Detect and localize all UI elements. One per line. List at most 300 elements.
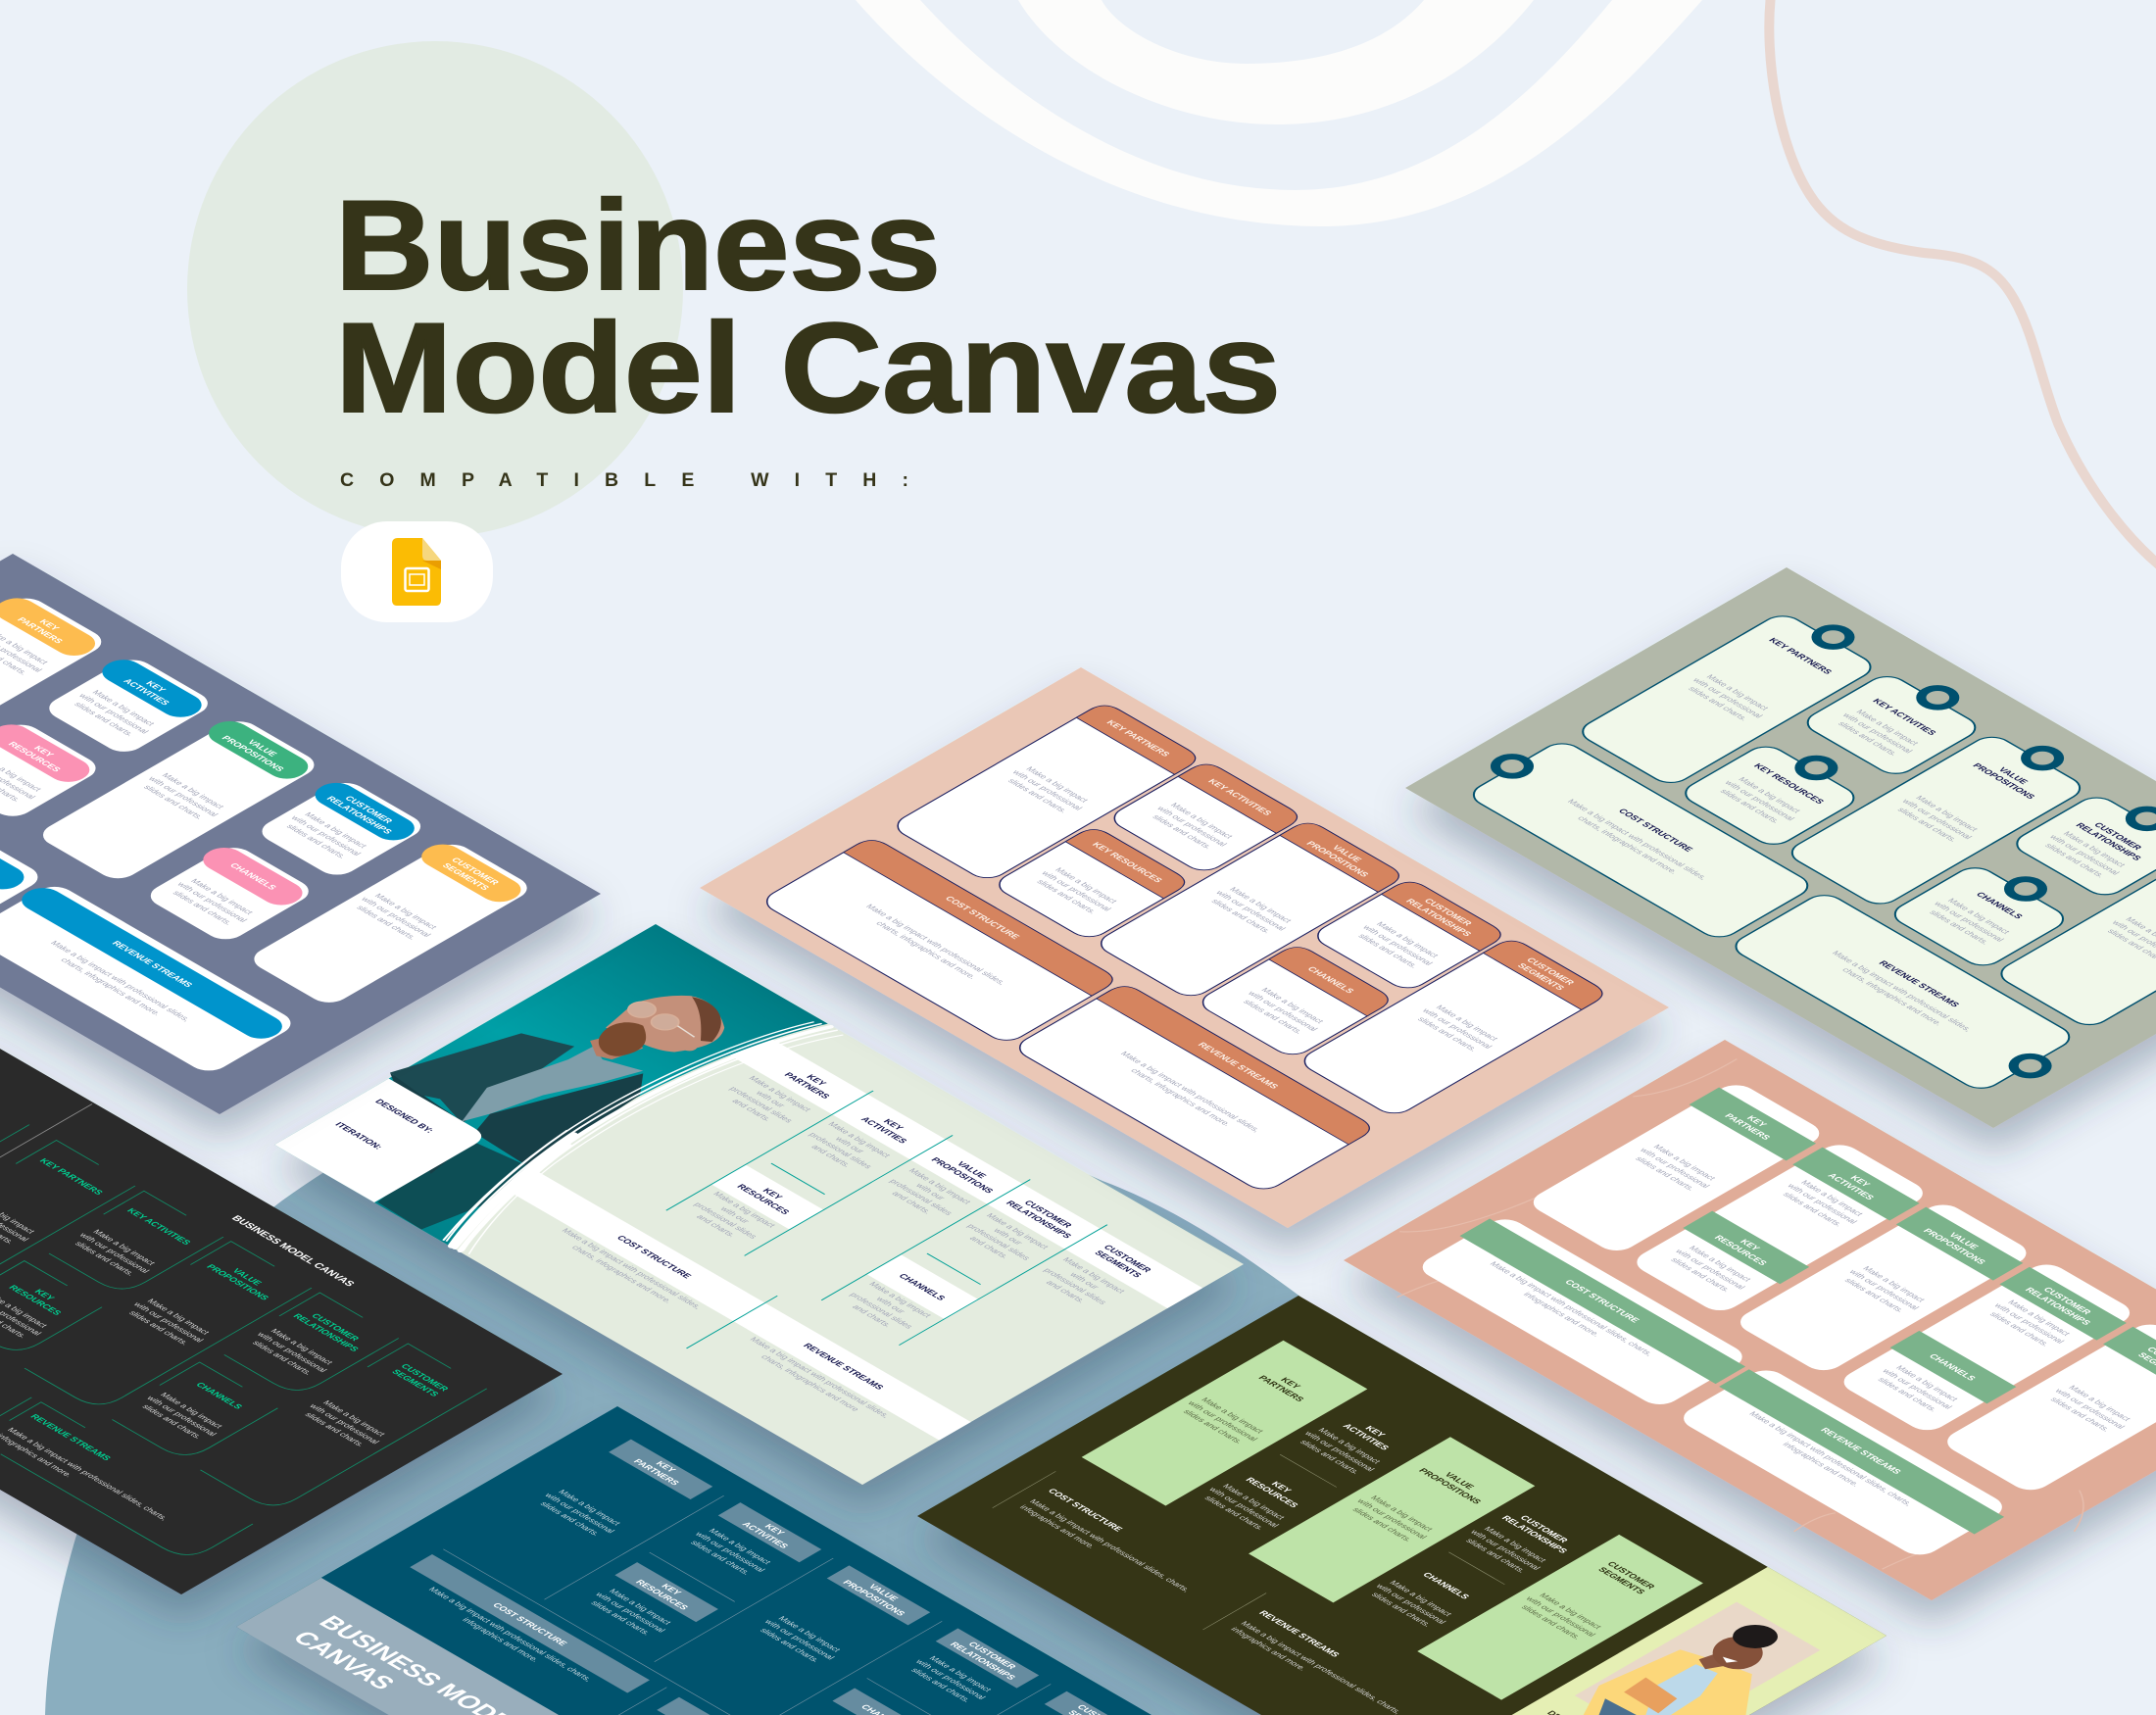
panel: mint canvas slide with portrait [274,924,1244,1485]
customer relationships card: slides and charts. [1356,932,1420,969]
key activities card: slides and charts. [1836,720,1900,758]
customer segments card [1993,845,2156,1030]
photo: woman with tablet [1584,1625,1778,1715]
key activities card: with our professional [1839,711,1915,755]
value propositions card: slides and charts. [1209,898,1274,935]
channels card: slides and charts. [1928,908,1991,946]
key partners card [1574,603,1893,788]
dark slide labels: VALUE [230,1267,264,1287]
dark slide body copy: slides and charts. [303,1411,368,1448]
mint slide labels: COST STRUCTURE [614,1234,694,1280]
customer relationships card: RELATIONSHIPS [2023,1286,2093,1326]
value propositions card [1730,1199,2037,1377]
revenue streams card: REVENUE STREAMS [1196,1041,1281,1090]
navy slide labels: KEY [762,1523,787,1537]
mint slide body copy: and charts. [890,1190,934,1215]
mint slide body copy: Make a big impact [984,1211,1051,1250]
customer relationships card: Make a big impact [2006,1298,2073,1337]
dark slide labels [0,1153,451,1525]
key partners card: slides and charts. [1005,777,1070,814]
revenue streams card [1728,891,2090,1101]
mint slide body copy: Make a big impact [1060,1256,1127,1295]
key resources card: slides and charts. [1669,1256,1733,1294]
customer relationships card: CUSTOMER [2041,1286,2093,1316]
mint slide body copy: Make a big impact with professional slides, [560,1227,704,1310]
key partners card: KEY PARTNERS [1767,636,1835,675]
value propositions card: Make a big impact [1228,886,1294,924]
key activities card: KEY ACTIVITIES [1871,697,1938,736]
mint slide labels: PROPOSITIONS [929,1156,996,1195]
customer segments card: Make a big impact [1434,1004,1500,1042]
cost structure card [1452,731,1816,942]
olive slide body copy: with our professional [1523,1594,1598,1638]
navy slide labels: COST STRUCTURE [491,1601,569,1647]
mint slide body copy: Make a big impact with professional slides, [748,1336,892,1419]
customer relationships card: slides and charts. [1987,1310,2052,1348]
navy slide labels: PROPOSITIONS [841,1579,907,1617]
key partners card [1523,1079,1831,1257]
channels card: Make a big impact [189,877,256,915]
dark slide heading: BUSINESS MODEL CANVAS [228,1214,357,1288]
key resources card: Make a big impact [1737,775,1803,814]
navy slide body copy: with our professional [913,1657,988,1701]
key partners card: KEY [1744,1114,1769,1128]
key partners card: Make a big impact [1024,765,1091,804]
olive slide labels: KEY [1279,1376,1302,1390]
olive slide labels: KEY [1269,1480,1294,1494]
mint slide body copy: with our [1067,1270,1102,1291]
dark slide body copy: with our professional [144,1394,220,1438]
olive slide photo backdrop [1575,1602,1820,1715]
channels card: CHANNELS [1927,1352,1978,1382]
key partners card: with our professional [1638,1146,1712,1190]
olive slide body copy [1011,1375,1641,1715]
revenue streams card: Make a big impact with professional slides, [49,939,193,1023]
key activities card: Make a big impact [1799,1179,1866,1217]
title [335,173,1281,439]
mint slide teal dividers [557,1090,1107,1408]
customer relationships card: Make a big impact [2061,830,2128,868]
key resources card [991,825,1192,942]
customer relationships card: with our professional [288,813,364,858]
navy slide body copy [393,1461,1106,1715]
mint slide body copy: and charts. [851,1303,894,1329]
olive slide body copy: slides and charts. [1181,1408,1246,1446]
channels card: slides and charts. [1242,998,1305,1035]
customer segments card: slides and charts. [355,904,418,941]
cost structure card [759,836,1120,1045]
mint slide body copy: with our [832,1135,867,1154]
key partners card: slides and charts. [1687,685,1750,722]
navy slide labels: KEY [660,1583,683,1596]
olive slide body copy: Make a big impact [1482,1525,1548,1563]
olive slide body copy: Make a big impact [1316,1426,1383,1465]
navy slide body copy: with our professional [693,1530,767,1573]
customer relationships card: CUSTOMER [2092,821,2144,852]
panel: navy canvas slide [236,1406,1184,1715]
mint slide body copy: professional slides [848,1291,915,1330]
revenue streams card [1011,982,1377,1194]
dark slide body copy: with our professional [76,1231,152,1274]
key partners card: PARTNERS [1723,1112,1773,1141]
value propositions card: Make a big impact [1861,1265,1928,1303]
subtitle: compatible with: COMPATIBLE WITH: [340,469,908,491]
customer segments card: with our professional [359,895,433,938]
mint slide body copy: professional slides [807,1131,874,1170]
mint slide body copy: professional slides [727,1085,795,1124]
designed by panel [274,1079,489,1202]
dark slide body copy: with our professional [254,1330,329,1374]
revenue streams card: REVENUE STREAMS [1877,959,1962,1008]
key partners card: with our professional [1690,676,1765,719]
customer segments card: SEGMENTS [1515,961,1567,992]
decorative squiggle line [1769,0,2156,566]
key activities card: with our professional [1785,1182,1860,1225]
dark slide labels: RELATIONSHIPS [291,1312,361,1352]
panel: slate blue canvas slide [0,554,601,1114]
navy slide labels: PARTNERS [631,1457,681,1487]
navy slide separators [372,1441,1158,1715]
decorative concentric arcs [856,0,1702,226]
mint slide body copy: professional slides [692,1200,760,1240]
key activities card [1685,1139,1935,1283]
designed by panel: DESIGNED BY: [373,1098,436,1134]
key activities card: Make a big impact [1854,709,1921,747]
value propositions card [29,713,322,883]
navy slide body copy: slides and charts. [538,1500,603,1538]
mint slide body copy: and charts. [1044,1279,1088,1304]
revenue streams card: Make a big impact with professional slides, charts, [1747,1410,1915,1507]
channels card [1833,1331,2016,1437]
mint slide labels: REVENUE STREAMS [801,1342,886,1391]
customer segments card [1936,1318,2156,1496]
dark slide body copy: slides and charts. [140,1403,205,1440]
key activities card: slides and charts. [1781,1191,1845,1228]
key resources card: with our professional [1722,778,1797,822]
customer segments card: slides and charts. [1416,1015,1480,1053]
revenue streams card: REVENUE STREAMS [1819,1426,1903,1475]
mint slide labels: PARTNERS [782,1071,832,1100]
customer segments card: CUSTOMER [1525,956,1577,986]
cost structure card: COST STRUCTURE [1616,808,1695,853]
channels card: CHANNELS [1974,891,2025,920]
customer relationships card: slides and charts. [2043,842,2107,879]
navy slide labels [437,1452,1127,1715]
navy slide body copy: with our professional [593,1591,668,1634]
dark slide body copy: with our professional [131,1300,206,1344]
olive slide labels: PARTNERS [1256,1374,1306,1403]
mint slide labels [558,1065,1154,1410]
channels card: CHANNELS [1305,965,1356,995]
value propositions card: with our professional [1899,797,1975,841]
olive slide body copy: infographics and more. [1017,1503,1098,1549]
navy slide labels: RELATIONSHIPS [948,1641,1018,1681]
key activities card [36,653,217,757]
key resources card: slides and charts. [1035,878,1100,915]
value propositions card: VALUE [245,738,279,758]
channels card: with our professional [1880,1367,1955,1410]
navy slide body copy: Make a big impact [707,1527,773,1565]
dark slide body copy: Make a big impact [269,1327,335,1366]
customer relationships card: with our professional [1991,1301,2067,1345]
olive slide body copy: Make a big impact [1538,1592,1604,1630]
revenue streams card: Make a big impact with professional slides, [1118,1050,1263,1133]
key activities card: KEY ACTIVITIES [1206,777,1274,816]
mint slide body copy: with our [913,1181,948,1201]
decorative blue arch [45,1127,1372,1715]
value propositions card: with our professional [1846,1268,1922,1311]
mint slide labels: ACTIVITIES [858,1115,909,1145]
cost structure card: Make a big impact with professional slides, charts, [1488,1260,1655,1357]
channels card: with our professional [1245,989,1320,1033]
cost structure card: COST STRUCTURE [943,895,1022,941]
key resources card: Make a big impact [1687,1245,1753,1283]
value propositions card: VALUE [1330,844,1364,863]
channels card: CHANNELS [227,861,278,891]
value propositions card [1093,819,1406,1001]
customer segments card [1297,937,1609,1118]
dark slide labels: SEGMENTS [390,1368,441,1397]
dark slide body copy: slides and charts. [127,1309,191,1347]
dark slide body copy: with our professional [307,1401,382,1446]
mint slide body copy: professional slides [965,1222,1033,1261]
icon: Google Slides badge [341,521,493,622]
olive slide body copy: with our professional [1301,1429,1377,1473]
mint slide labels: CUSTOMER [1022,1199,1074,1229]
key partners card: KEY PARTNERS [1104,718,1172,758]
olive slide body copy: Make a big impact [1388,1579,1454,1617]
mint slide body copy: professional slides [888,1177,955,1216]
customer segments card: SEGMENTS [440,861,492,892]
cost structure card [1410,1212,1756,1413]
key activities card: ACTIVITIES [1826,1172,1877,1201]
key activities card: KEY [144,679,168,694]
key partners card [0,591,110,759]
key resources card: with our professional [1673,1248,1747,1291]
customer relationships card: RELATIONSHIPS [1403,898,1474,938]
key resources card: RESOURCES [6,740,63,773]
customer segments card [241,837,535,1007]
olive slide labels: KEY [1363,1424,1388,1439]
key resources card: slides and charts. [1718,788,1783,824]
panel: salmon canvas slide [1344,1040,2156,1600]
navy slide body copy: Make a big impact with professional slides, charts, [426,1586,595,1683]
navy slide labels: CUSTOMER [966,1641,1018,1671]
mint slide body copy: with our [717,1204,752,1225]
mint slide body copy: Make a big impact [867,1280,934,1319]
value propositions card: Make a big impact [160,771,226,810]
navy slide header tabs [410,1440,1148,1715]
customer segments card: with our professional [1419,1006,1494,1050]
navy slide body copy: slides and charts. [689,1539,753,1576]
key resources card: Make a big impact [1053,866,1119,905]
olive slide labels: RELATIONSHIPS [1499,1514,1570,1554]
mint slide body copy: professional slides [1042,1266,1109,1305]
key resources card: KEY RESOURCES [1090,841,1164,884]
channels card [1195,943,1396,1059]
cost structure card: Make a big impact with professional slides, [1565,798,1710,881]
key resources card [0,717,104,821]
revenue streams card: infographics and more. [1781,1441,1862,1488]
dark slide labels: PROPOSITIONS [205,1263,271,1301]
key partners card: Make a big impact [1651,1143,1718,1182]
cost structure card: charts, infographics and more. [1576,814,1681,875]
mint slide body copy: and charts. [730,1098,774,1123]
mint slide labels: CUSTOMER [1102,1244,1153,1274]
channels card: Make a big impact [1945,897,2012,935]
mint slide body copy [512,1074,1128,1431]
key partners card: Make a big impact [1704,673,1771,711]
mint slide labels: RELATIONSHIPS [1004,1200,1074,1240]
decorative pale green circle [187,41,683,537]
channels card: slides and charts. [1876,1376,1940,1413]
navy slide body copy: Make a big impact [557,1488,623,1527]
designed by panel: ITERATION: [333,1121,385,1151]
olive slide labels [1046,1362,1767,1715]
olive slide body copy: Make a big impact [1200,1396,1266,1435]
olive slide green blocks [1082,1341,1703,1700]
mint slide body copy: and charts. [695,1213,738,1239]
navy slide body copy: slides and charts. [909,1666,973,1703]
title: Business [335,173,941,317]
dark slide body copy: Make a big impact [159,1391,225,1430]
mint slide labels: SEGMENTS [1093,1250,1144,1279]
olive slide body copy: with our professional [1185,1399,1260,1443]
channels card [1886,855,2086,970]
customer relationships card: CUSTOMER [343,795,395,824]
key activities card: Make a big impact [1168,802,1235,840]
customer relationships card: RELATIONSHIPS [324,795,394,835]
customer relationships card: CUSTOMER [1422,897,1474,927]
mint slide body copy: Make a big impact [826,1120,893,1158]
key resources card: KEY [31,744,56,759]
channels card: slides and charts. [171,889,235,926]
dark slide cell outlines [0,1096,535,1577]
panel: olive canvas slide [917,1296,1886,1715]
customer segments card: Make a big impact [2067,1384,2133,1422]
key activities card [1106,760,1304,875]
value propositions card: PROPOSITIONS [1971,761,2037,801]
cost structure card: COST STRUCTURE [1563,1278,1642,1324]
key resources card: KEY [1738,1238,1762,1251]
olive slide labels: SEGMENTS [1596,1566,1647,1595]
olive slide body copy: with our professional [1206,1486,1282,1529]
key resources card [1626,1211,1809,1317]
mint slide white header bands [495,1031,1202,1441]
value propositions card: Make a big impact [1914,794,1981,833]
key activities card: slides and charts. [1151,813,1214,851]
customer relationships card [1891,1258,2141,1402]
mint slide labels: KEY [760,1187,785,1200]
value propositions card: slides and charts. [1842,1277,1907,1314]
olive slide body copy: slides and charts. [1464,1537,1528,1574]
mint slide body copy: charts, infographics and more [759,1353,862,1413]
olive slide body copy: slides and charts. [1350,1506,1415,1544]
value propositions card: VALUE [1947,1231,1981,1250]
channels card: with our professional [174,880,250,923]
value propositions card: PROPOSITIONS [220,734,286,772]
navy slide labels: ACTIVITIES [740,1520,791,1549]
olive slide labels: RESOURCES [1244,1476,1300,1509]
navy slide body copy: with our professional [542,1491,617,1535]
portrait: man in dark suit [377,996,724,1230]
title: Model Canvas [335,296,1281,439]
mint slide body copy: Make a big impact [906,1167,973,1205]
mint slide body copy: and charts. [809,1143,854,1168]
key partners card: with our professional [1009,768,1085,811]
dark slide body copy [0,1173,427,1550]
olive slide body copy: with our professional [1373,1582,1448,1625]
navy slide body copy: Make a big impact [776,1615,843,1653]
navy slide labels: VALUE [866,1583,901,1602]
olive slide body copy: slides and charts. [1202,1494,1267,1532]
value propositions card [1784,724,2103,908]
olive slide body copy: with our professional [1354,1496,1430,1541]
dark slide labels: CUSTOMER [399,1362,451,1393]
key resources card: KEY RESOURCES [1751,762,1826,806]
dark slide labels: CHANNELS [194,1381,245,1410]
value propositions card: slides and charts. [1895,806,1960,843]
navy slide body copy: slides and charts. [589,1599,653,1637]
customer relationships card [2009,784,2156,900]
value propositions card: PROPOSITIONS [1921,1227,1987,1265]
olive slide separators [993,1398,1504,1694]
mint slide body copy: and charts. [967,1235,1011,1260]
channels card: Make a big impact [1894,1364,1960,1402]
navy slide labels: KEY [654,1459,678,1474]
navy slide body copy: Make a big impact [607,1588,673,1626]
dark slide body copy: slides and charts. [73,1240,137,1277]
olive slide body copy: Make a big impact with professional slides, charts, [1028,1497,1193,1593]
mint slide labels: RESOURCES [735,1183,792,1215]
cost structure card [0,727,46,929]
panel: dark charcoal canvas slide [0,1034,563,1594]
dark slide body copy: Make a big impact [321,1398,388,1438]
value propositions card: with our professional [145,774,220,818]
dark slide labels: CUSTOMER [310,1312,362,1343]
mint slide body copy: with our [991,1226,1025,1247]
olive slide labels: CHANNELS [1421,1571,1472,1600]
mint slide body copy: Make a big impact [747,1074,813,1113]
navy slide body copy: with our professional [761,1618,837,1661]
mint slide body copy: Make a big impact [711,1190,778,1229]
key partners card: KEY [37,618,62,632]
channels card: with our professional [1932,900,2006,943]
revenue streams card: charts, infographics and more. [59,956,164,1017]
navy slide body copy: Make a big impact [927,1654,994,1693]
olive slide yellow side panel [1509,1567,1886,1715]
dark slide labels: KEY [32,1288,57,1301]
key activities card [1799,663,1998,778]
dark slide body copy: Make a big impact with professional slides, charts, [6,1426,171,1522]
olive slide body copy: Make a big impact [1221,1483,1288,1521]
white brush scribbles [409,1002,846,1254]
olive slide body copy: Make a big impact [1369,1494,1436,1533]
customer relationships card: RELATIONSHIPS [2074,821,2143,861]
revenue streams card [1670,1362,2016,1563]
key activities card: KEY [1848,1174,1873,1188]
key activities card: ACTIVITIES [122,677,172,707]
mint slide labels: KEY [805,1073,828,1087]
olive slide body copy: slides and charts. [1369,1591,1434,1628]
dark slide body copy: Make a big impact [91,1228,158,1266]
olive slide body copy: slides and charts. [1519,1603,1584,1641]
customer segments card: slides and charts. [2048,1396,2113,1433]
key activities card: with our professional [76,692,151,735]
olive slide body copy: slides and charts. [1298,1439,1362,1476]
customer relationships card: Make a big impact [1374,920,1441,958]
olive slide labels: VALUE [1443,1471,1476,1491]
